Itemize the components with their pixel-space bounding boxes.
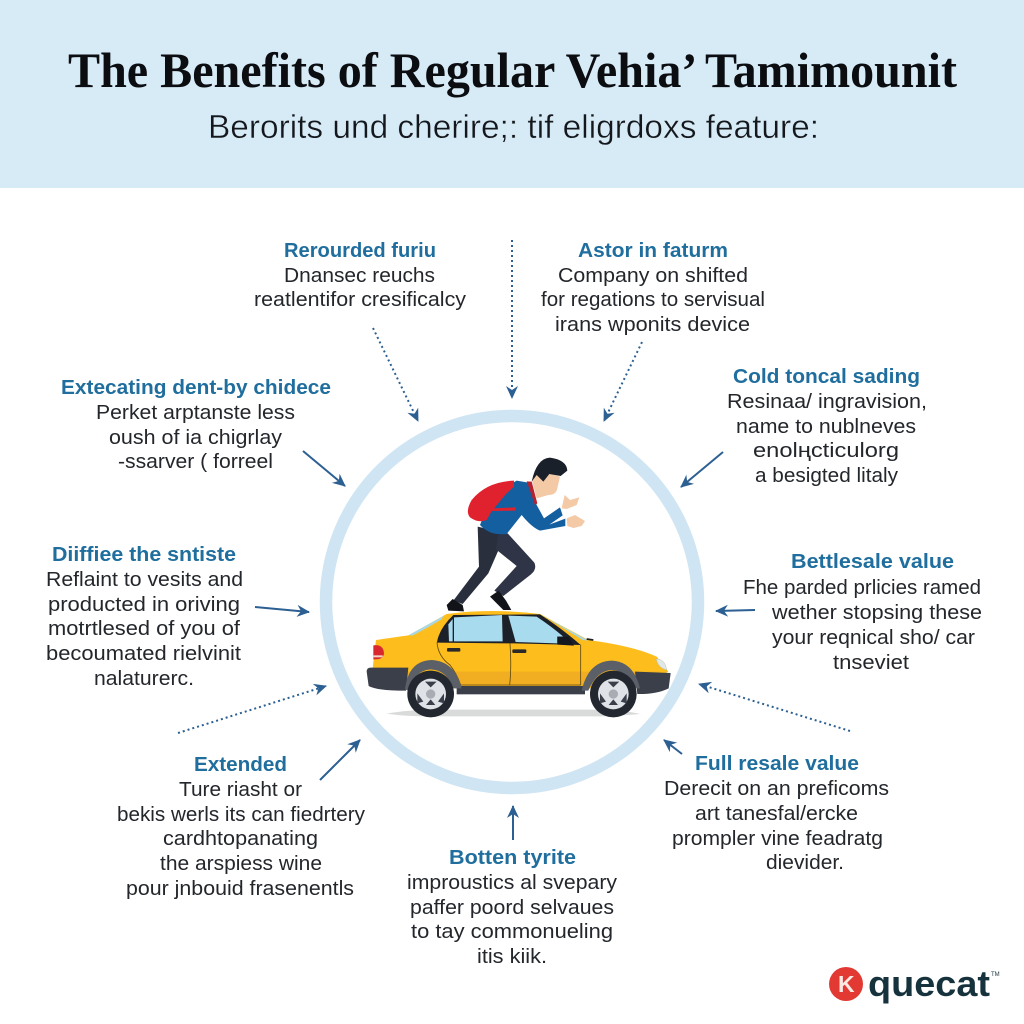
benefit: Extecating dent-by chidece: oush of ia chigrlay — [109, 427, 282, 449]
benefit: Cold toncal sading: enolңcticulorg — [753, 440, 899, 462]
benefit: Astor in faturm: Company on shifted — [558, 265, 748, 287]
arrow: middle right — [716, 610, 755, 611]
heading: Bettlesale value — [791, 551, 954, 573]
arrow: upper right — [681, 452, 723, 487]
benefit: Diiffiee the sntiste: producted in oriving — [48, 594, 240, 616]
heading: Rerourded furiu — [284, 240, 436, 262]
benefit: Full resale value — [664, 753, 889, 874]
subtitle: Berorits und cherire;: tif eligrdoxs feature: — [208, 108, 819, 145]
ground shadow — [387, 710, 640, 716]
heading: Extended — [194, 754, 287, 776]
arrow: middle left — [255, 607, 309, 612]
heading: Cold toncal sading — [733, 366, 920, 388]
benefit: Extecating dent-by chidece: Perket arptanste less — [96, 402, 295, 424]
benefit: Diiffiee the sntiste: Reflaint to vesits and — [46, 569, 243, 591]
benefit: Bettlesale value: tnseviet — [833, 652, 909, 674]
logo: quecat: K — [838, 971, 855, 997]
benefit: Astor in faturm — [541, 240, 765, 336]
head — [532, 470, 560, 498]
dotted arrow: top left — [373, 328, 418, 421]
benefit: Extended — [117, 754, 365, 900]
central ring — [326, 416, 698, 788]
benefit: Diiffiee the sntiste: nalaturerc. — [94, 668, 194, 690]
arrow: upper left — [303, 451, 345, 486]
shoes — [447, 599, 464, 611]
logo: quecat — [829, 963, 1000, 1004]
arrow: bottom right — [664, 740, 682, 754]
benefit: Rerourded furiu: Dnansec reuchs — [284, 265, 435, 287]
benefit: Extecating dent-by chidece: -ssarver ( forreel — [118, 451, 273, 473]
benefit: Cold toncal sading: name to nublneves — [736, 416, 916, 438]
arrow: bottom left — [320, 740, 360, 780]
hands — [562, 495, 579, 509]
benefit: Full resale value: art tanesfal/ercke — [695, 803, 858, 825]
benefit: Diiffiee the sntiste: motrtlesed of you of — [48, 618, 240, 640]
benefit: Cold toncal sading: a besigted litaly — [755, 465, 898, 487]
benefit: Bettlesale value: wether stopsing these — [771, 602, 982, 624]
benefit: Bettlesale value — [743, 551, 982, 674]
benefit: Extended: bekis werls its can fiedrtery — [117, 804, 365, 826]
torso and arms — [480, 481, 565, 534]
benefit: Rerourded furiu — [254, 240, 466, 311]
dotted arrow: top right — [604, 342, 642, 421]
dotted arrow: top centre — [511, 240, 513, 398]
dotted arrow: lower left — [178, 686, 326, 733]
benefit: Diiffiee the sntiste — [46, 544, 243, 690]
heading: Botten tyrite — [449, 847, 576, 869]
benefit: Diiffiee the sntiste: becoumated rielvinit — [46, 643, 241, 665]
benefit: Full resale value: prompler vine feadratg — [672, 828, 883, 850]
arrows pointing to the ring — [178, 240, 850, 840]
illustration: person on yellow car — [367, 458, 671, 717]
benefit: Extended: pour jnbouid frasenentls — [126, 878, 354, 900]
benefit: Botten tyrite: paffer poord selvaues — [410, 897, 614, 919]
benefit: Botten tyrite — [407, 847, 617, 968]
wheels — [407, 671, 637, 717]
header band — [0, 0, 1024, 188]
heading: Diiffiee the sntiste — [52, 544, 236, 566]
title: The Benefits of Regular Vehia’ Tamimounit — [68, 42, 957, 98]
benefit: Astor in faturm: irans wponits device — [555, 314, 750, 336]
benefit: Botten tyrite: itis kiik. — [477, 946, 547, 968]
benefit: Rerourded furiu: reatlentifor cresificalcy — [254, 289, 466, 311]
benefit: Extended: Ture riasht or — [179, 779, 302, 801]
benefit: Cold toncal sading — [727, 366, 927, 487]
heading: Full resale value — [695, 753, 859, 775]
benefit: Extended: the arspiess wine — [160, 853, 322, 875]
benefit: Full resale value: Derecit on an preficoms — [664, 778, 889, 800]
benefit: Full resale value: dievider. — [766, 852, 844, 874]
front leg — [494, 533, 535, 596]
heading: Extecating dent-by chidece — [61, 377, 331, 399]
back leg — [453, 527, 507, 604]
logo: quecat: quecat — [868, 963, 990, 1004]
backpack — [468, 481, 516, 521]
benefit: Bettlesale value: your reqnical sho/ car — [772, 627, 975, 649]
heading: Astor in faturm — [578, 240, 728, 262]
benefit: Extecating dent-by chidece — [61, 377, 331, 473]
car — [367, 611, 671, 694]
benefit: Bettlesale value: Fhe parded prlicies ramed — [743, 577, 981, 599]
dotted arrow: lower right — [699, 684, 850, 731]
benefit: Extended: cardhtopanating — [163, 828, 318, 850]
logo: quecat: TM — [991, 972, 1000, 978]
benefit: Astor in faturm: for regations to servisual — [541, 289, 765, 311]
benefit: Botten tyrite: improustics al svepary — [407, 872, 617, 894]
person — [447, 458, 585, 611]
benefit: Cold toncal sading: Resinaa/ ingravision, — [727, 391, 927, 413]
benefit: Botten tyrite: to tay commonueling — [411, 921, 613, 943]
arrow: bottom centre — [512, 806, 514, 840]
